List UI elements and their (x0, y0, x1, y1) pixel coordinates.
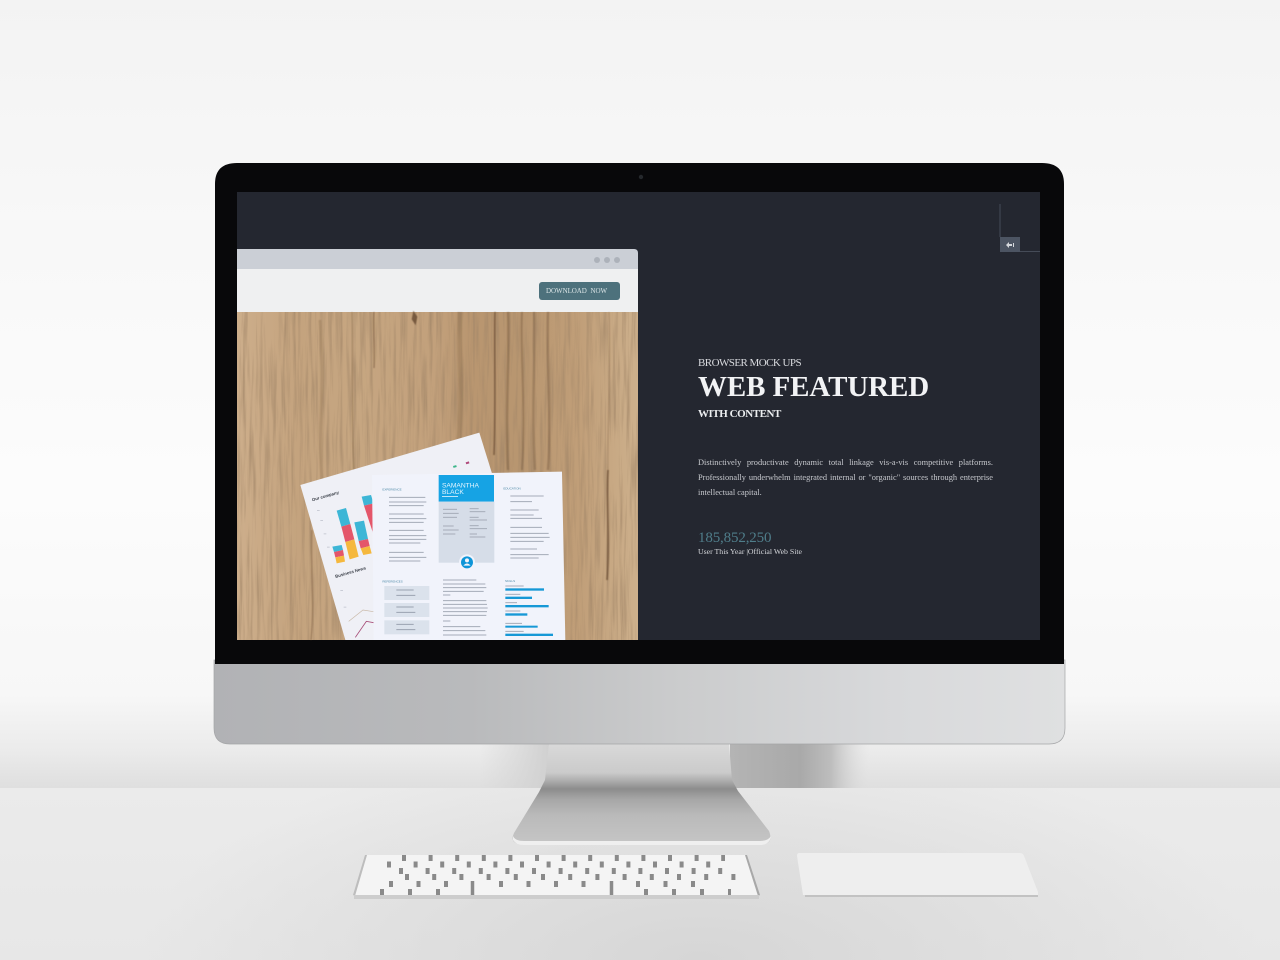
stat: user count (698, 530, 802, 556)
browser window (237, 249, 638, 640)
icon: arrows (1006, 242, 1014, 248)
reference cards (384, 586, 429, 634)
stat caption: User This Year |Official Web Site (698, 547, 802, 556)
screen background (237, 192, 1040, 640)
tagline: WITH CONTENT (698, 408, 781, 420)
paper: resume sheet: EDUCATION (503, 486, 521, 490)
resume grey panel (439, 502, 494, 563)
corner decoration (1000, 204, 1040, 252)
paper: resume sheet: SKILLS (505, 579, 515, 583)
paper: back sheet with charts: Our company (311, 490, 340, 502)
text block: description: intellectual capital. (698, 488, 762, 497)
browser dots (594, 257, 620, 263)
icon: profile (459, 554, 475, 570)
monitor camera (639, 175, 643, 179)
paper: resume sheet: BLACK (442, 489, 464, 496)
monitor stand (513, 744, 771, 845)
photo: wood desk with papers (237, 312, 638, 640)
button background (539, 282, 620, 300)
subheading: BROWSER MOCK UPS (698, 357, 801, 369)
paper: resume sheet (372, 472, 565, 640)
skill bars (505, 588, 553, 636)
heading: WEB FEATURED (698, 371, 929, 403)
trackpad (797, 853, 1038, 897)
paper: resume sheet: EXPERIENCE (382, 488, 402, 492)
text block: description (698, 458, 993, 497)
browser title bar (237, 249, 638, 269)
resume blue header (439, 475, 494, 502)
paper: back sheet with charts: Business News (335, 565, 367, 579)
text block: description: Professionally underwhelm integrated internal or "organic" sources through enterprise (698, 473, 993, 482)
shadow: behind stand left (480, 744, 549, 790)
paper: back sheet with charts (300, 433, 492, 640)
button label: DOWNLOAD NOW (546, 287, 607, 295)
shadow: behind stand right (730, 744, 870, 790)
keyboard key gaps (380, 858, 736, 895)
stat number: 185,852,250 (698, 530, 771, 546)
monitor bezel (215, 163, 1064, 664)
monitor chin (214, 660, 1065, 744)
text block: headings (698, 357, 929, 420)
background: desk (0, 788, 1280, 960)
paper: resume sheet: SAMANTHA (442, 483, 480, 490)
paper: resume sheet: REFERENCES (382, 579, 403, 583)
text block: description: Distinctively productivate dynamic total linkage vis-a-vis competitive platforms. (698, 458, 993, 467)
keyboard (353, 855, 760, 899)
browser toolbar (237, 269, 638, 312)
